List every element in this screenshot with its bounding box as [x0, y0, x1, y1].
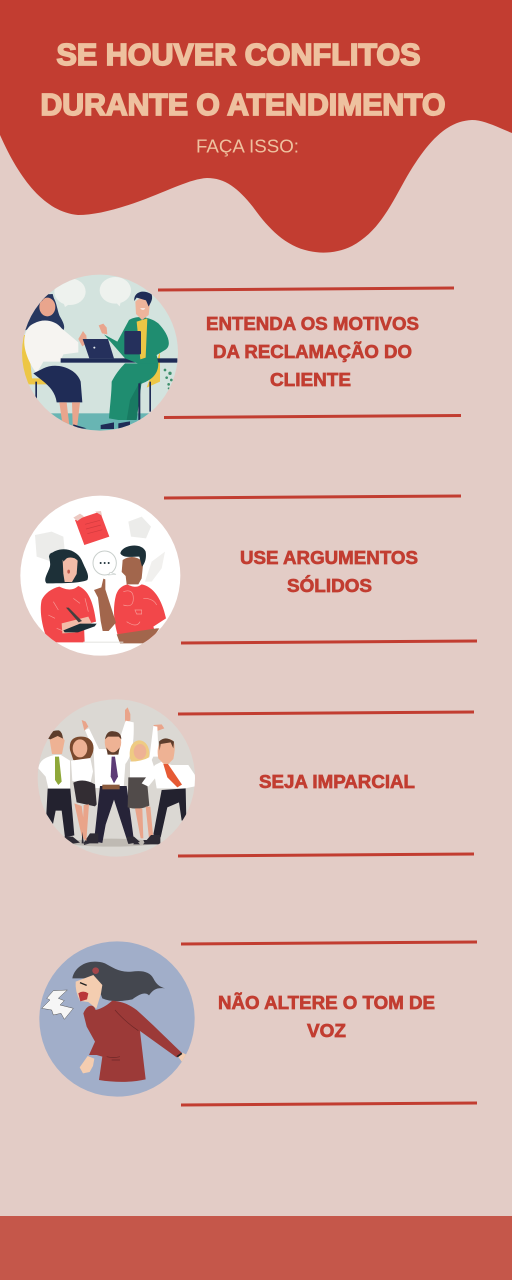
line [158, 288, 454, 290]
icon: cheering team [38, 699, 202, 857]
icon: meeting at a table [20, 275, 180, 433]
item 4 [39, 941, 477, 1105]
title: SE HOUVER CONFLITOS [56, 38, 420, 72]
item 1 [20, 275, 461, 433]
text: item 3: SEJA IMPARCIAL [259, 771, 415, 792]
text: item 4: VOZ [307, 1020, 346, 1041]
line [181, 1103, 477, 1105]
header wave [0, 0, 512, 253]
item 3 [38, 699, 474, 857]
title: DURANTE O ATENDIMENTO [40, 88, 446, 122]
line [164, 416, 461, 418]
subtitle: FAÇA ISSO: [196, 136, 299, 156]
text: item 2: SÓLIDOS [287, 575, 372, 596]
text: item 1: CLIENTE [270, 369, 351, 390]
icon: two people talking [20, 496, 180, 656]
text: item 2 [240, 547, 418, 596]
text: item 4 [218, 992, 435, 1041]
line [178, 712, 474, 714]
line [178, 854, 474, 856]
line [181, 942, 477, 944]
text: item 4: NÃO ALTERE O TOM DE [218, 992, 435, 1013]
item 2 [20, 496, 477, 656]
icon: angry woman shouting [39, 941, 195, 1097]
line [181, 641, 477, 643]
text: item 1: ENTENDA OS MOTIVOS [206, 313, 419, 334]
text: item 1 [206, 313, 419, 390]
text: item 2: USE ARGUMENTOS [240, 547, 418, 568]
footer band [0, 1216, 512, 1280]
text: item 1: DA RECLAMAÇÃO DO [213, 341, 412, 362]
line [164, 496, 461, 498]
title [40, 38, 446, 122]
